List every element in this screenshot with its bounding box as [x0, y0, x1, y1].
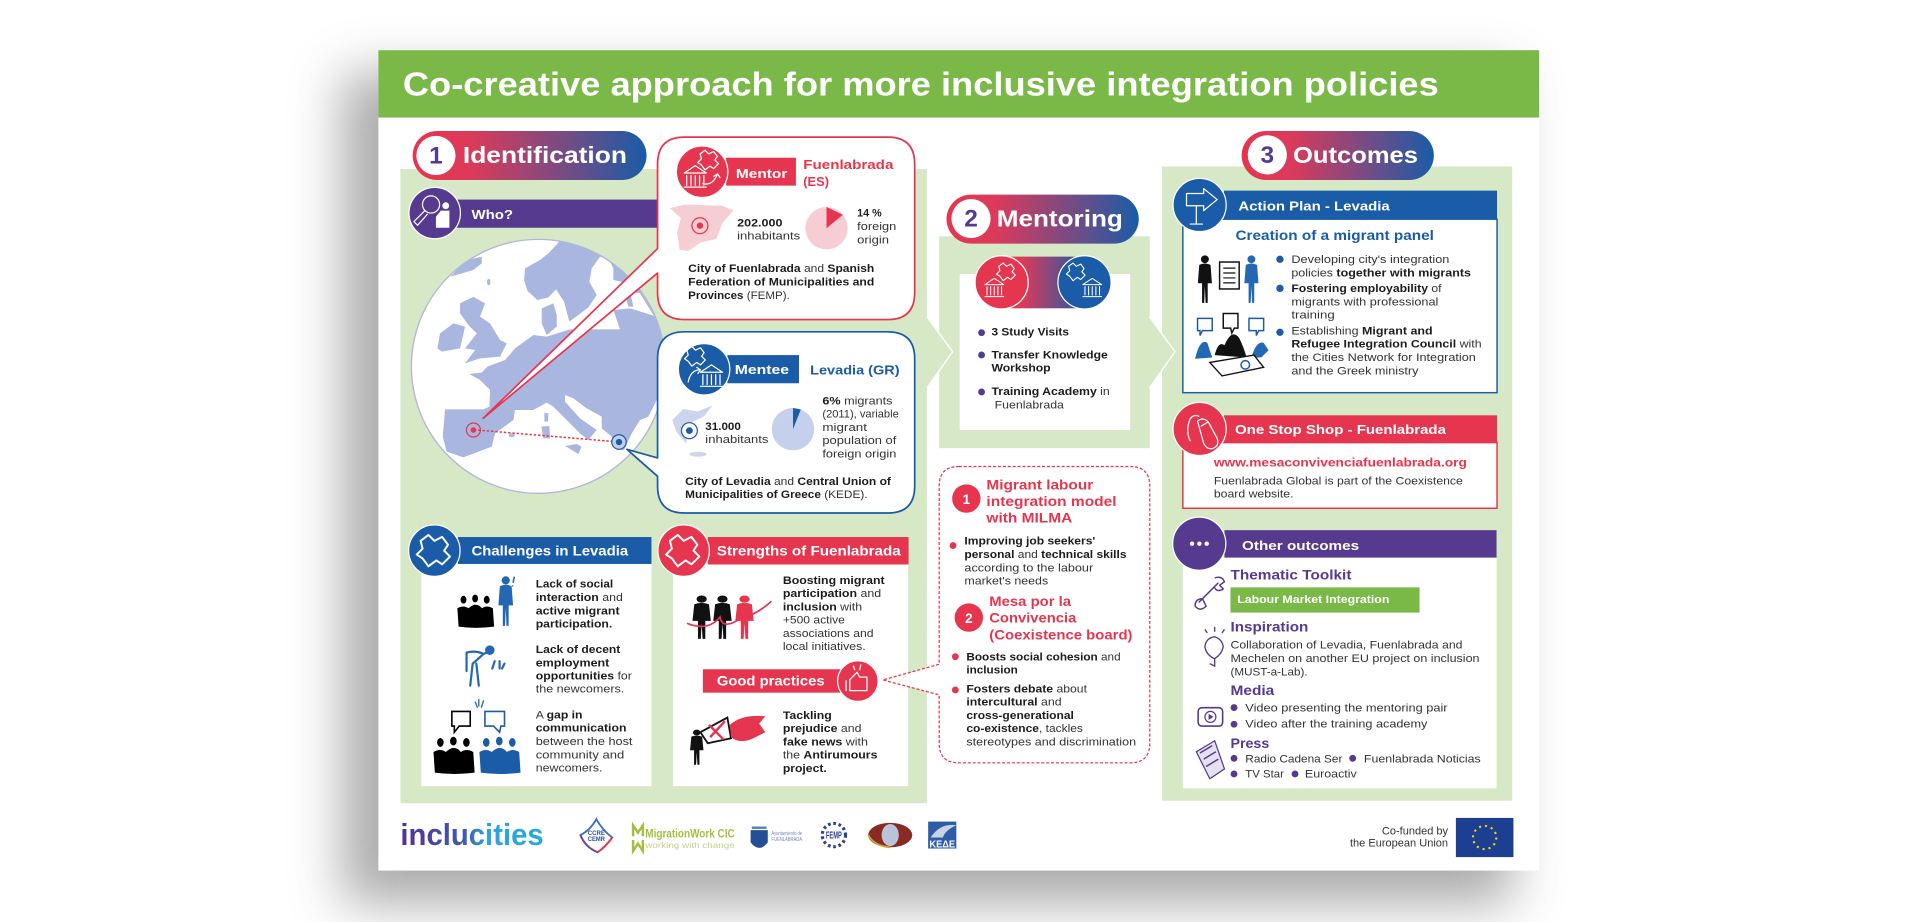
other outcomes card: Radio Cadena Ser	[1245, 753, 1343, 765]
mentee header: Mentee	[735, 362, 789, 377]
heading: mentoring	[947, 195, 1139, 244]
co-funded text: the European Union	[1350, 837, 1448, 849]
logo: CCRE CEMR: CCRE	[588, 830, 605, 837]
challenge text 1	[536, 579, 623, 630]
panel: challenges in Levadia: Challenges in Levadia	[471, 543, 629, 559]
mentor header: (ES)	[803, 174, 829, 189]
icon: three people with ribbon	[687, 595, 771, 639]
logo: Ayuntamiento de Fuenlabrada: FUENLABRADA	[771, 837, 802, 843]
panel: challenges in Levadia	[409, 525, 651, 786]
heading: outcomes: 3	[1261, 142, 1274, 169]
icon: mentor and mentee link	[975, 256, 1111, 309]
mentor description	[688, 263, 875, 302]
panel: strengths of Fuenlabrada	[658, 525, 909, 786]
icon: two groups and speech bubbles	[433, 699, 521, 774]
strength text: local initiatives.	[783, 641, 866, 653]
icon: person with binoculars	[467, 647, 505, 686]
who bar	[409, 187, 661, 239]
bullet list: mentoring	[978, 327, 1110, 411]
icon: magnifier and person	[414, 196, 449, 228]
panel: strengths of Fuenlabrada: Strengths of Fuenlabrada	[717, 543, 901, 559]
practice 1: MILMA: personal and technical skills	[964, 549, 1127, 561]
challenge text 2: the newcomers.	[536, 684, 624, 696]
arrow: mentoring to outcomes	[1149, 317, 1175, 388]
practice 2: Mesa por la Convivencia: Boosts social cohesion and	[966, 651, 1121, 663]
practice 1: MILMA: market's needs	[964, 576, 1049, 588]
mentee callout: foreign origin	[822, 448, 896, 460]
mentor callout: origin	[857, 234, 889, 246]
practice 2: Mesa por la Convivencia: co-existence , tackles	[966, 723, 1083, 735]
antirumours text: the Antirumours	[783, 750, 877, 762]
challenge text 3	[536, 710, 632, 775]
icon: thumbs up	[838, 661, 878, 701]
practice 2: Mesa por la Convivencia	[952, 593, 1136, 749]
heading: outcomes	[1242, 131, 1434, 180]
bullet list: action plan: the Cities Network for Integration	[1291, 352, 1476, 364]
who bar: Who?	[471, 207, 513, 222]
other outcomes card: Press	[1230, 736, 1269, 751]
mentor description: Provinces (FEMP).	[688, 290, 790, 302]
practice 1: MILMA: with MILMA	[985, 510, 1072, 526]
practice 1: MILMA: Improving job seekers'	[964, 536, 1096, 548]
one stop shop card: www.mesaconvivenciafuenlabrada.org	[1213, 456, 1467, 470]
panel: outcomes	[1162, 131, 1512, 801]
bullet list: mentoring: Transfer Knowledge	[991, 349, 1108, 361]
mentee description	[685, 476, 891, 501]
poster card	[378, 50, 1539, 871]
challenge text 1: Lack of social	[536, 579, 613, 591]
bullet list: action plan: training	[1291, 310, 1335, 322]
mentee description: Municipalities of Greece (KEDE).	[685, 489, 868, 501]
mentee description: City of Levadia and Central Union of	[685, 476, 891, 488]
logo: MigrationWork CIC: MigrationWork CIC	[645, 828, 735, 841]
practice 1: MILMA	[950, 476, 1127, 588]
heading: identification	[413, 131, 647, 180]
strength text: inclusion with	[783, 601, 862, 613]
heading: identification: 1	[429, 142, 443, 169]
pie chart: 6% migrants	[772, 408, 814, 450]
practice 2: Mesa por la Convivencia: stereotypes and discrimination	[966, 737, 1136, 749]
antirumours text: project.	[783, 763, 827, 775]
mentor header	[676, 146, 894, 198]
heading: outcomes: Outcomes	[1293, 142, 1418, 168]
other outcomes card: Video after the training academy	[1245, 718, 1428, 730]
practice 2: Mesa por la Convivencia: cross-generational	[966, 710, 1074, 722]
action plan card: Creation of a migrant panel	[1235, 227, 1434, 243]
bullet list: mentoring: 3 Study Visits	[991, 327, 1069, 339]
heading: identification: Identification	[463, 142, 627, 168]
logo: Central Union emblem	[868, 823, 912, 847]
challenge text 2: opportunities for	[536, 671, 632, 683]
bullet list: action plan: Fostering employability of	[1291, 283, 1443, 295]
mentor callout: inhabitants	[737, 230, 801, 242]
logo: Ayuntamiento de Fuenlabrada	[751, 826, 802, 848]
other outcomes card: Fuenlabrada Noticias	[1364, 753, 1481, 765]
mentee callout: (2011), variable	[822, 409, 899, 421]
logo: Ayuntamiento de Fuenlabrada: Ayuntamiento de	[771, 831, 802, 837]
other outcomes card: Video presenting the mentoring pair	[1245, 702, 1448, 714]
antirumours text: prejudice and	[783, 723, 861, 735]
practice 2: Mesa por la Convivencia: Fosters debate about	[966, 684, 1087, 696]
strength text: +500 active	[783, 615, 845, 627]
bullet list: action plan: migrants with professional	[1291, 296, 1438, 308]
challenge text 3: communication	[536, 723, 627, 735]
mentee callout: migrant	[822, 422, 867, 434]
title: Co-creative approach for more inclusive integration policies	[403, 67, 1439, 104]
mentee header: Levadia (GR)	[810, 363, 900, 378]
logo: inclucities: inclucities	[400, 818, 544, 852]
one stop shop card: board website.	[1214, 489, 1294, 501]
practice 1: MILMA: Migrant labour	[986, 476, 1094, 492]
mentor header: Fuenlabrada	[803, 157, 894, 172]
mentee callout: population of	[822, 435, 897, 447]
challenge text 3: A gap in	[536, 710, 583, 722]
strength text: associations and	[783, 628, 874, 640]
bullet list: action plan	[1276, 254, 1482, 377]
mentor callout: 202.000	[737, 218, 782, 230]
mentor callout	[483, 137, 915, 418]
bullet list: mentoring: Training Academy in	[991, 386, 1110, 398]
mentee callout: 31.000	[705, 421, 741, 433]
icon: puzzle piece red	[658, 525, 709, 576]
bullet list: action plan: Establishing Migrant and	[1291, 325, 1433, 337]
tag: labour market integration: Labour Market Integration	[1237, 594, 1390, 606]
other outcomes card	[1173, 517, 1497, 788]
mentee callout: 6% migrants	[822, 395, 893, 407]
title banner	[378, 50, 1539, 118]
icon: people with document	[1198, 255, 1258, 303]
bullet list: mentoring: Workshop	[991, 363, 1051, 375]
icon: megaphone against rumours	[690, 716, 765, 765]
logo: CCRE CEMR: CEMR	[588, 836, 605, 843]
icon: ellipsis	[1173, 517, 1226, 570]
logo: FEMP	[822, 823, 846, 847]
mentor description: City of Fuenlabrada and Spanish	[688, 263, 875, 275]
other outcomes card: Euroactiv	[1305, 769, 1357, 781]
mentor description: Federation of Municipalities and	[688, 277, 874, 289]
practice 2: Mesa por la Convivencia: Convivencia	[989, 610, 1076, 626]
icon: mouse	[1173, 402, 1226, 455]
icon: wrench	[1195, 577, 1224, 609]
practice 1: MILMA: integration model	[986, 493, 1117, 509]
strength text	[783, 575, 885, 653]
map: Spain	[670, 204, 733, 251]
location markers and dotted link	[466, 423, 626, 449]
co-funded text	[1350, 826, 1449, 849]
action plan card: Action Plan - Levadia	[1238, 199, 1391, 214]
good practices tag: Good practices	[717, 673, 825, 688]
antirumours text	[783, 710, 877, 775]
challenge text 3: newcomers.	[536, 763, 602, 775]
antirumours text: Tackling	[783, 710, 832, 722]
icon: crowd and lone person	[457, 576, 514, 628]
co-funded text: Co-funded by	[1382, 826, 1449, 838]
bullet list: action plan: Refugee Integration Council with	[1291, 339, 1482, 351]
challenge text 3: community and	[536, 749, 624, 761]
practice 1: MILMA: according to the labour	[964, 562, 1094, 574]
challenge text 2: Lack of decent	[536, 644, 621, 656]
logo: KEDE: ΚΕΔΕ	[929, 839, 955, 850]
map: Greece	[672, 405, 713, 457]
panel: mentoring	[939, 195, 1175, 448]
mentee header	[678, 344, 900, 395]
bullet list: action plan: and the Greek ministry	[1291, 365, 1419, 377]
logo: MigrationWork CIC: working with change	[644, 840, 735, 850]
other outcomes card: Inspiration	[1230, 619, 1308, 634]
icon: newspaper	[1196, 741, 1224, 779]
icon: signpost	[1173, 178, 1226, 232]
challenge text 2: employment	[536, 657, 610, 669]
antirumours text: fake news with	[783, 736, 868, 748]
icon: light bulb	[1205, 627, 1224, 666]
other outcomes card: Thematic Toolkit	[1230, 567, 1352, 582]
good practices tag	[703, 661, 878, 701]
flag: European Union	[1456, 818, 1513, 857]
mentor callout: 14 %	[857, 208, 882, 220]
logo: KEDE	[928, 822, 956, 850]
practice 2: Mesa por la Convivencia: intercultural and	[966, 697, 1062, 709]
challenge text 2	[536, 644, 632, 696]
one stop shop card	[1173, 402, 1497, 508]
arrow: identification to mentoring	[927, 317, 953, 388]
bullet list: action plan: policies together with migrants	[1291, 267, 1471, 279]
challenge text 3: between the host	[536, 736, 632, 748]
strength text: participation and	[783, 588, 881, 600]
tag: labour market integration	[1230, 587, 1420, 613]
other outcomes card: Other outcomes	[1242, 538, 1359, 553]
callout: good practices detail	[883, 467, 1150, 763]
bullet list: mentoring: Fuenlabrada	[995, 399, 1065, 411]
one stop shop card: One Stop Shop - Fuenlabrada	[1235, 422, 1447, 437]
other outcomes card: TV Star	[1245, 769, 1284, 781]
practice 1: MILMA: 1	[963, 492, 971, 507]
heading: mentoring: 2	[964, 206, 978, 233]
one stop shop card: Fuenlabrada Global is part of the Coexistence	[1214, 475, 1463, 487]
icon: round table discussion	[1195, 313, 1269, 376]
icon: video	[1198, 708, 1223, 726]
strength text: Boosting migrant	[783, 575, 885, 587]
challenge text 1: participation.	[536, 618, 612, 630]
logo: MigrationWork CIC	[633, 825, 735, 851]
pie chart: 14% foreign origin	[805, 207, 848, 249]
map of Europe	[411, 227, 677, 493]
logo: FEMP: FEMP	[826, 831, 842, 842]
mentor header: Mentor	[736, 166, 787, 181]
action plan card	[1173, 178, 1497, 393]
practice 2: Mesa por la Convivencia: Mesa por la	[989, 593, 1071, 609]
logo: CCRE CEMR	[580, 819, 612, 852]
footer logos	[400, 818, 1513, 857]
mentee callout	[627, 332, 915, 513]
challenge text 1: active migrant	[536, 605, 620, 617]
mentor callout: foreign	[857, 221, 896, 233]
other outcomes card: Mechelen on another EU project on inclusion	[1230, 653, 1480, 665]
heading: mentoring: Mentoring	[997, 206, 1123, 232]
icon: puzzle piece blue	[409, 525, 460, 576]
practice 2: Mesa por la Convivencia: inclusion	[966, 665, 1018, 677]
other outcomes card: Media	[1230, 683, 1275, 698]
panel: identification	[400, 131, 953, 803]
other outcomes card: Collaboration of Levadia, Fuenlabrada and	[1230, 640, 1463, 652]
bullet list: action plan: Developing city's integration	[1291, 254, 1449, 266]
other outcomes card: (MUST-a-Lab).	[1230, 666, 1308, 678]
mentee callout: inhabitants	[705, 434, 769, 446]
practice 2: Mesa por la Convivencia: 2	[965, 611, 973, 626]
practice 2: Mesa por la Convivencia: (Coexistence board)	[989, 626, 1133, 642]
challenge text 1: interaction and	[536, 592, 623, 604]
